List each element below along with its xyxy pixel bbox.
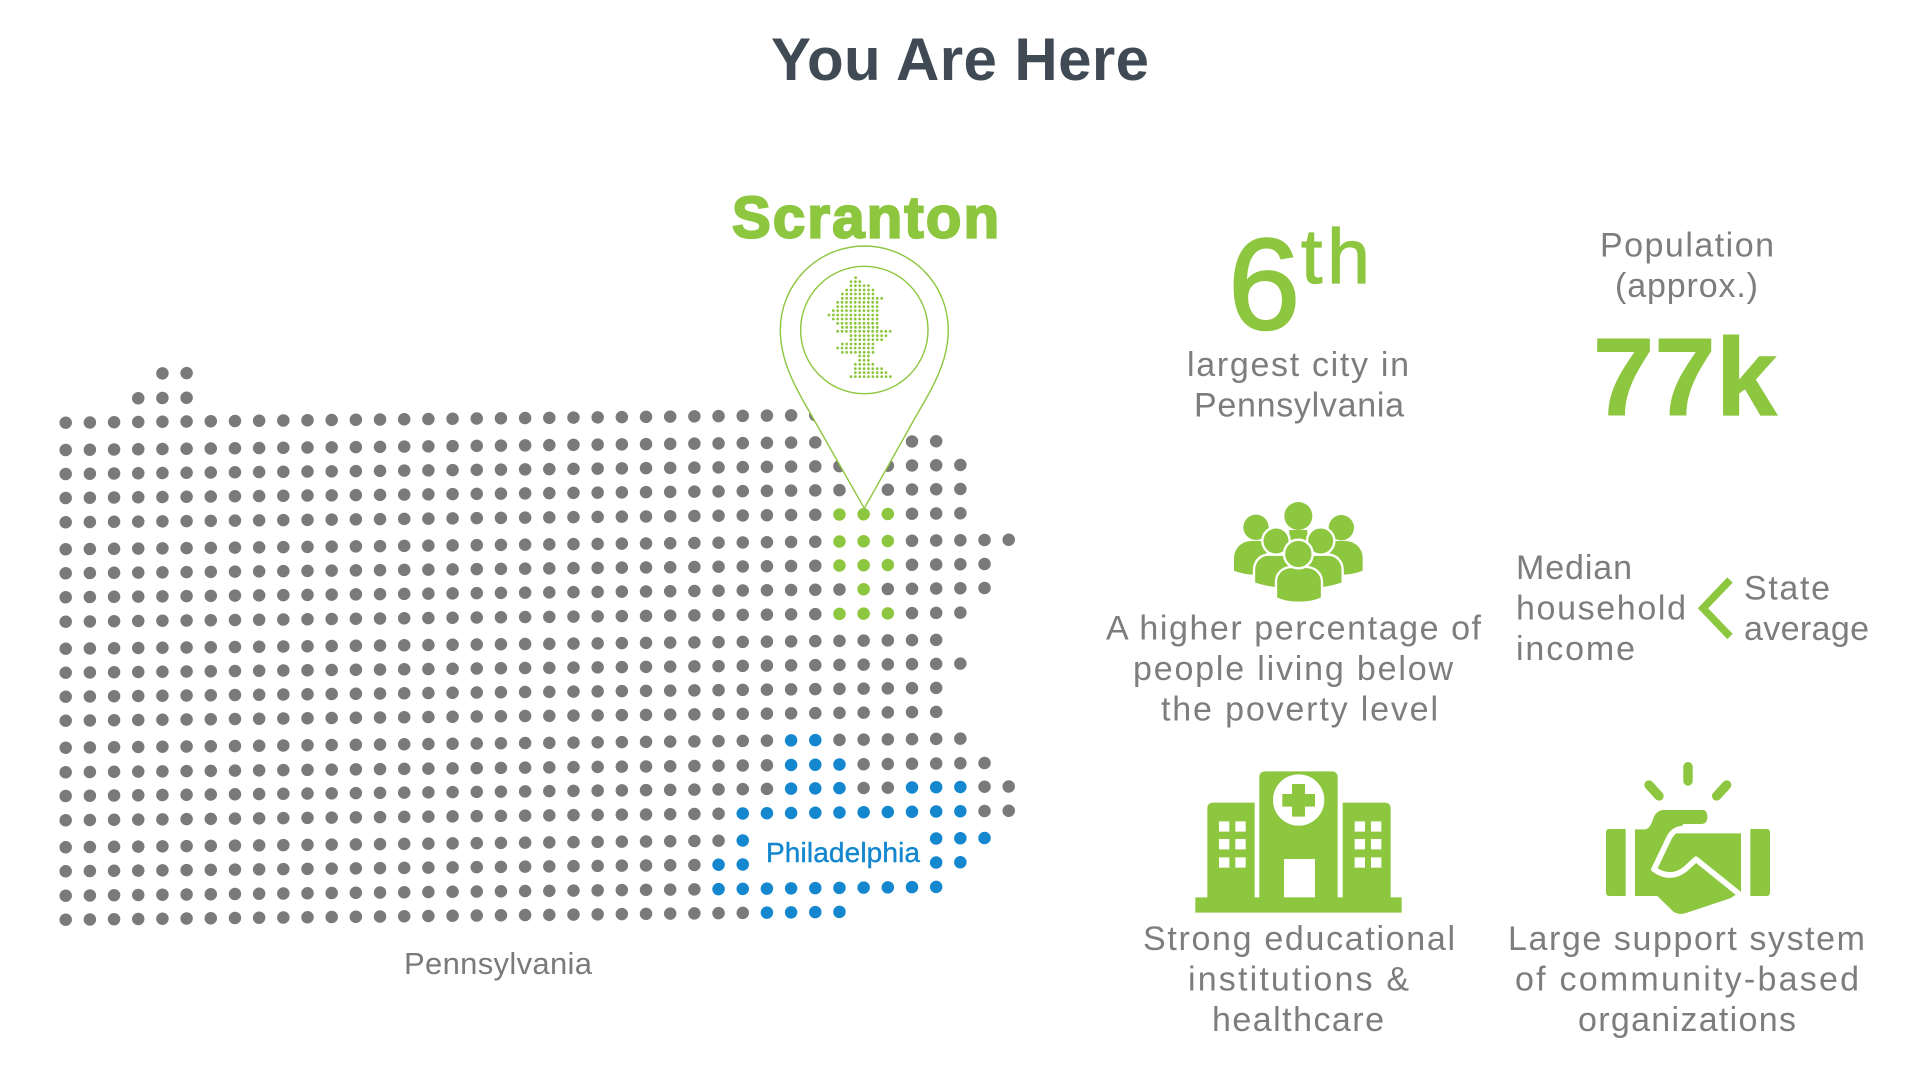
pin outline	[780, 246, 948, 508]
icon: hospital	[1195, 771, 1402, 913]
text: community support: of community-based	[1515, 960, 1859, 998]
hands	[1635, 810, 1741, 914]
text: community support: Large support system	[1508, 920, 1865, 958]
text: educational institutions: Strong educational	[1143, 920, 1455, 958]
text: educational institutions	[1143, 920, 1455, 1039]
big number 6th	[1228, 211, 1370, 357]
base and buildings	[1195, 771, 1402, 913]
label: Pennsylvania: Pennsylvania	[404, 946, 593, 981]
green Scranton dots	[839, 514, 888, 614]
caption: Population	[1600, 226, 1774, 264]
text: poverty level: A higher percentage of	[1106, 610, 1482, 648]
text: community support: organizations	[1578, 1001, 1796, 1039]
stat: population 77k	[1593, 226, 1778, 439]
big number 6th: th	[1301, 214, 1370, 300]
cuffs	[1606, 829, 1770, 896]
caption: (approx.)	[1615, 267, 1758, 305]
icon: less-than chevron	[1703, 580, 1730, 636]
caption: Pennsylvania	[1194, 386, 1404, 424]
caption	[1600, 226, 1774, 305]
text: median household income	[1516, 549, 1686, 668]
stat: 6th largest city	[1187, 211, 1409, 424]
rays	[1649, 767, 1727, 796]
big number 77k: 77k	[1593, 316, 1778, 439]
dot map: Pennsylvania	[66, 365, 1009, 920]
mini dotted county map	[829, 278, 895, 377]
text: median household income: Median	[1516, 549, 1632, 587]
grey state dots	[66, 365, 1009, 920]
big number 6th: 6	[1228, 211, 1300, 357]
text: educational institutions: institutions &	[1188, 960, 1409, 998]
caption	[1187, 346, 1409, 424]
label: Scranton: Scranton	[732, 186, 999, 250]
text: median household income: income	[1516, 630, 1635, 668]
text: median household income: household	[1516, 590, 1686, 628]
text: poverty level: the poverty level	[1161, 690, 1438, 728]
icon: handshake	[1606, 767, 1770, 914]
map pin	[780, 246, 948, 508]
text: community support	[1508, 920, 1865, 1039]
pin inner circle	[801, 266, 928, 394]
text: poverty level: people living below	[1133, 650, 1453, 688]
label: Philadelphia: Philadelphia	[766, 837, 920, 868]
text: state average: State	[1744, 570, 1830, 608]
text: educational institutions: healthcare	[1212, 1001, 1384, 1039]
text: poverty level	[1106, 610, 1482, 728]
caption: largest city in	[1187, 346, 1409, 384]
blue Philadelphia dots	[719, 738, 985, 913]
icon: group of people	[1234, 502, 1363, 603]
thumb gap	[1654, 829, 1742, 896]
title: You Are Here	[771, 26, 1149, 93]
text: state average: average	[1744, 610, 1869, 648]
text: state average	[1744, 570, 1869, 648]
